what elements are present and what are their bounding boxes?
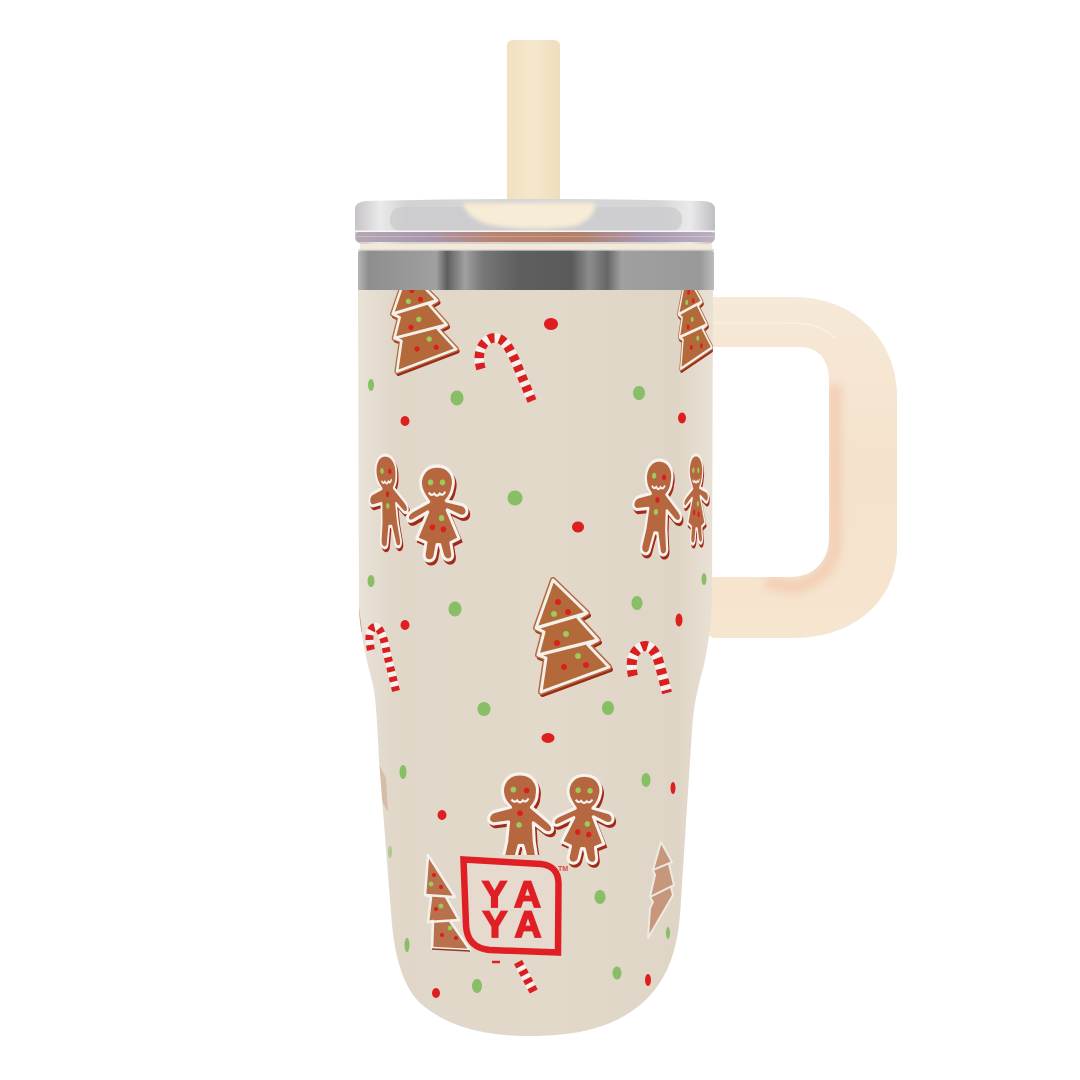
gingerbread pair: left	[366, 454, 469, 564]
tree: top left	[393, 271, 457, 374]
candy cane: left	[369, 627, 396, 691]
logo: YAYA badge	[464, 860, 568, 952]
cover over man's feet	[502, 855, 540, 861]
gingerbread pair: right	[630, 455, 709, 559]
left edge tree fragment	[359, 608, 362, 632]
candy cane: bottom fragment	[492, 962, 534, 992]
tree: centre	[536, 580, 610, 694]
metal collar	[358, 249, 714, 290]
logo wordmark: top row: Y	[482, 874, 507, 915]
logo wordmark: top row: A	[514, 874, 541, 915]
left edge gingerbread fragment	[379, 764, 388, 812]
logo wordmark: bottom row	[483, 904, 541, 945]
logo wordmark: bottom row: A	[515, 904, 541, 945]
red dots	[400, 318, 686, 998]
candy cane: right	[632, 646, 667, 693]
logo wordmark: top row	[482, 874, 541, 915]
handle	[708, 297, 897, 638]
clear lid	[355, 199, 715, 244]
gingerbread pair: bottom	[489, 774, 617, 869]
tree: bottom left by logo	[425, 855, 470, 951]
tumbler body with pattern	[358, 243, 713, 1036]
handle inner shading	[766, 385, 835, 587]
product illustration: gingerbread tumbler	[355, 40, 897, 1036]
pattern clipped to body	[358, 271, 713, 998]
trademark: TM	[558, 866, 568, 873]
tree: bottom right	[648, 842, 674, 938]
straw	[507, 40, 560, 202]
candy cane: top	[479, 338, 532, 401]
logo wordmark: bottom row: Y	[483, 904, 508, 945]
green dots	[368, 379, 706, 993]
tree: top right	[678, 274, 713, 371]
